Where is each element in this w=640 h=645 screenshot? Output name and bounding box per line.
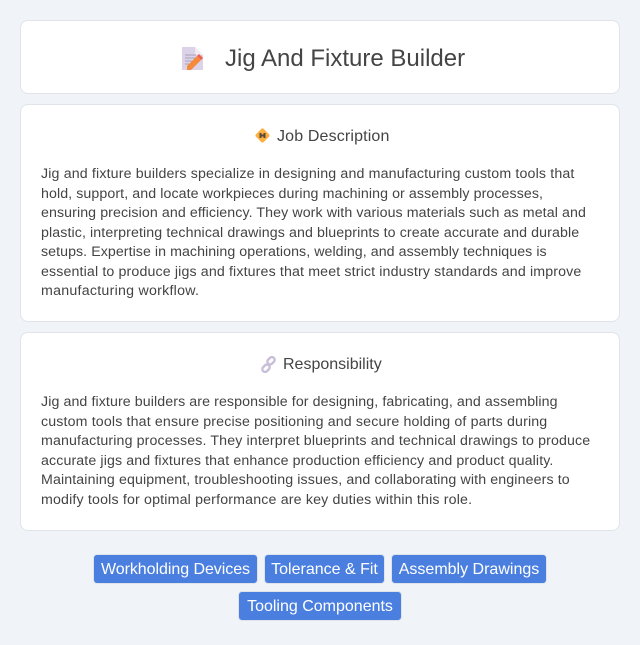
text block: responsibility — [41, 394, 590, 508]
icon: chain link — [261, 356, 276, 373]
heading: responsibility: Responsibility — [283, 356, 382, 373]
tag: tolerance and fit — [264, 554, 385, 584]
tag: tooling components — [238, 591, 402, 621]
text block: job description: manufacturing workflow. — [41, 283, 199, 299]
heading: job description: Job Description — [277, 128, 390, 145]
tags row — [93, 554, 547, 621]
panel: responsibility — [20, 332, 620, 531]
text block: job description: Jig and fixture builders specialize in designing and manufacturing custom tools that — [41, 166, 575, 182]
tag: assembly drawings: Assembly Drawings — [399, 561, 539, 578]
text block: job description: plastic, interpreting technical drawings and blueprints to create accurate and durable — [41, 225, 579, 241]
tag: workholding devices: Workholding Devices — [101, 561, 250, 578]
tag: tooling components: Tooling Components — [247, 598, 393, 615]
icon: orange diamond sign — [256, 128, 270, 143]
text block: job description: ensuring precision and efficiency. They work with various materials such as metal and — [41, 205, 586, 221]
panel: job description — [20, 104, 620, 322]
text block: job description: setups. Expertise in machining operations, welding, and assembly techniques is — [41, 244, 547, 260]
text block: job description: hold, support, and locate workpieces during machining or assembly processes, — [41, 186, 543, 202]
tag: assembly drawings — [391, 554, 547, 584]
text block: job description: essential to produce jigs and fixtures that meet strict industry standards and improve — [41, 264, 581, 280]
text block: responsibility: accurate jigs and fixtures that enhance production efficiency and product quality. — [41, 453, 554, 469]
text block: responsibility: Maintaining equipment, troubleshooting issues, and collaborating with engineers to — [41, 472, 570, 488]
tag: workholding devices — [93, 554, 258, 584]
panel: title card — [20, 20, 620, 94]
title: Jig And Fixture Builder — [225, 45, 465, 72]
text block: responsibility: modify tools for optimal performance are key duties within this role. — [41, 492, 472, 508]
text block: responsibility: Jig and fixture builders are responsible for designing, fabricating, and assembling — [41, 394, 558, 410]
text block: responsibility: manufacturing processes. They interpret blueprints and technical drawings to produce — [41, 433, 590, 449]
icon: document with pencil — [182, 47, 203, 70]
text block: responsibility: custom tools that ensure precise positioning and secure holding of parts during — [41, 414, 547, 430]
tag: tolerance and fit: Tolerance & Fit — [271, 561, 378, 578]
text block: job description — [41, 166, 586, 299]
